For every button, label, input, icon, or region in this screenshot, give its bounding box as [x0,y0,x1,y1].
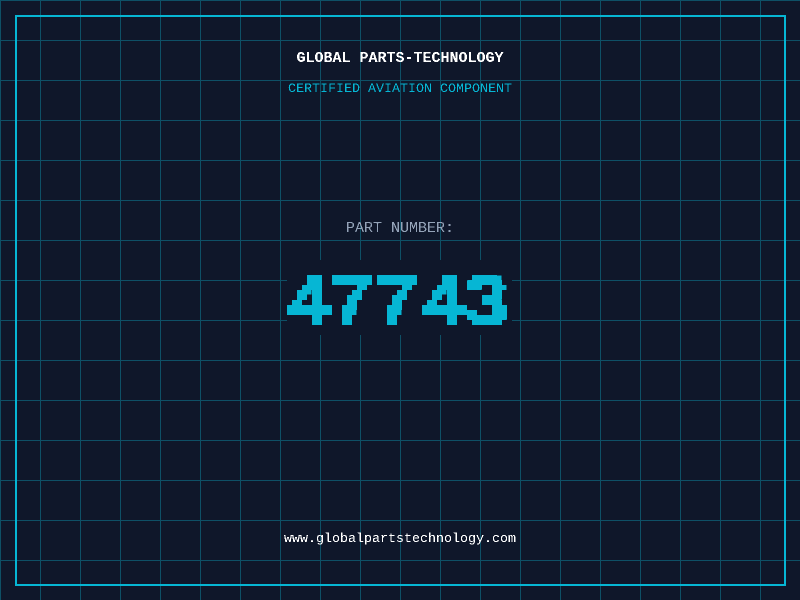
website url: www.globalpartstechnology.com [284,532,516,547]
part number value: 47743 [287,263,509,348]
title: GLOBAL PARTS-TECHNOLOGY [296,50,504,67]
number backing panel [287,260,512,335]
subtitle: CERTIFIED AVIATION COMPONENT [288,82,512,97]
part number label: PART NUMBER: [346,220,454,237]
